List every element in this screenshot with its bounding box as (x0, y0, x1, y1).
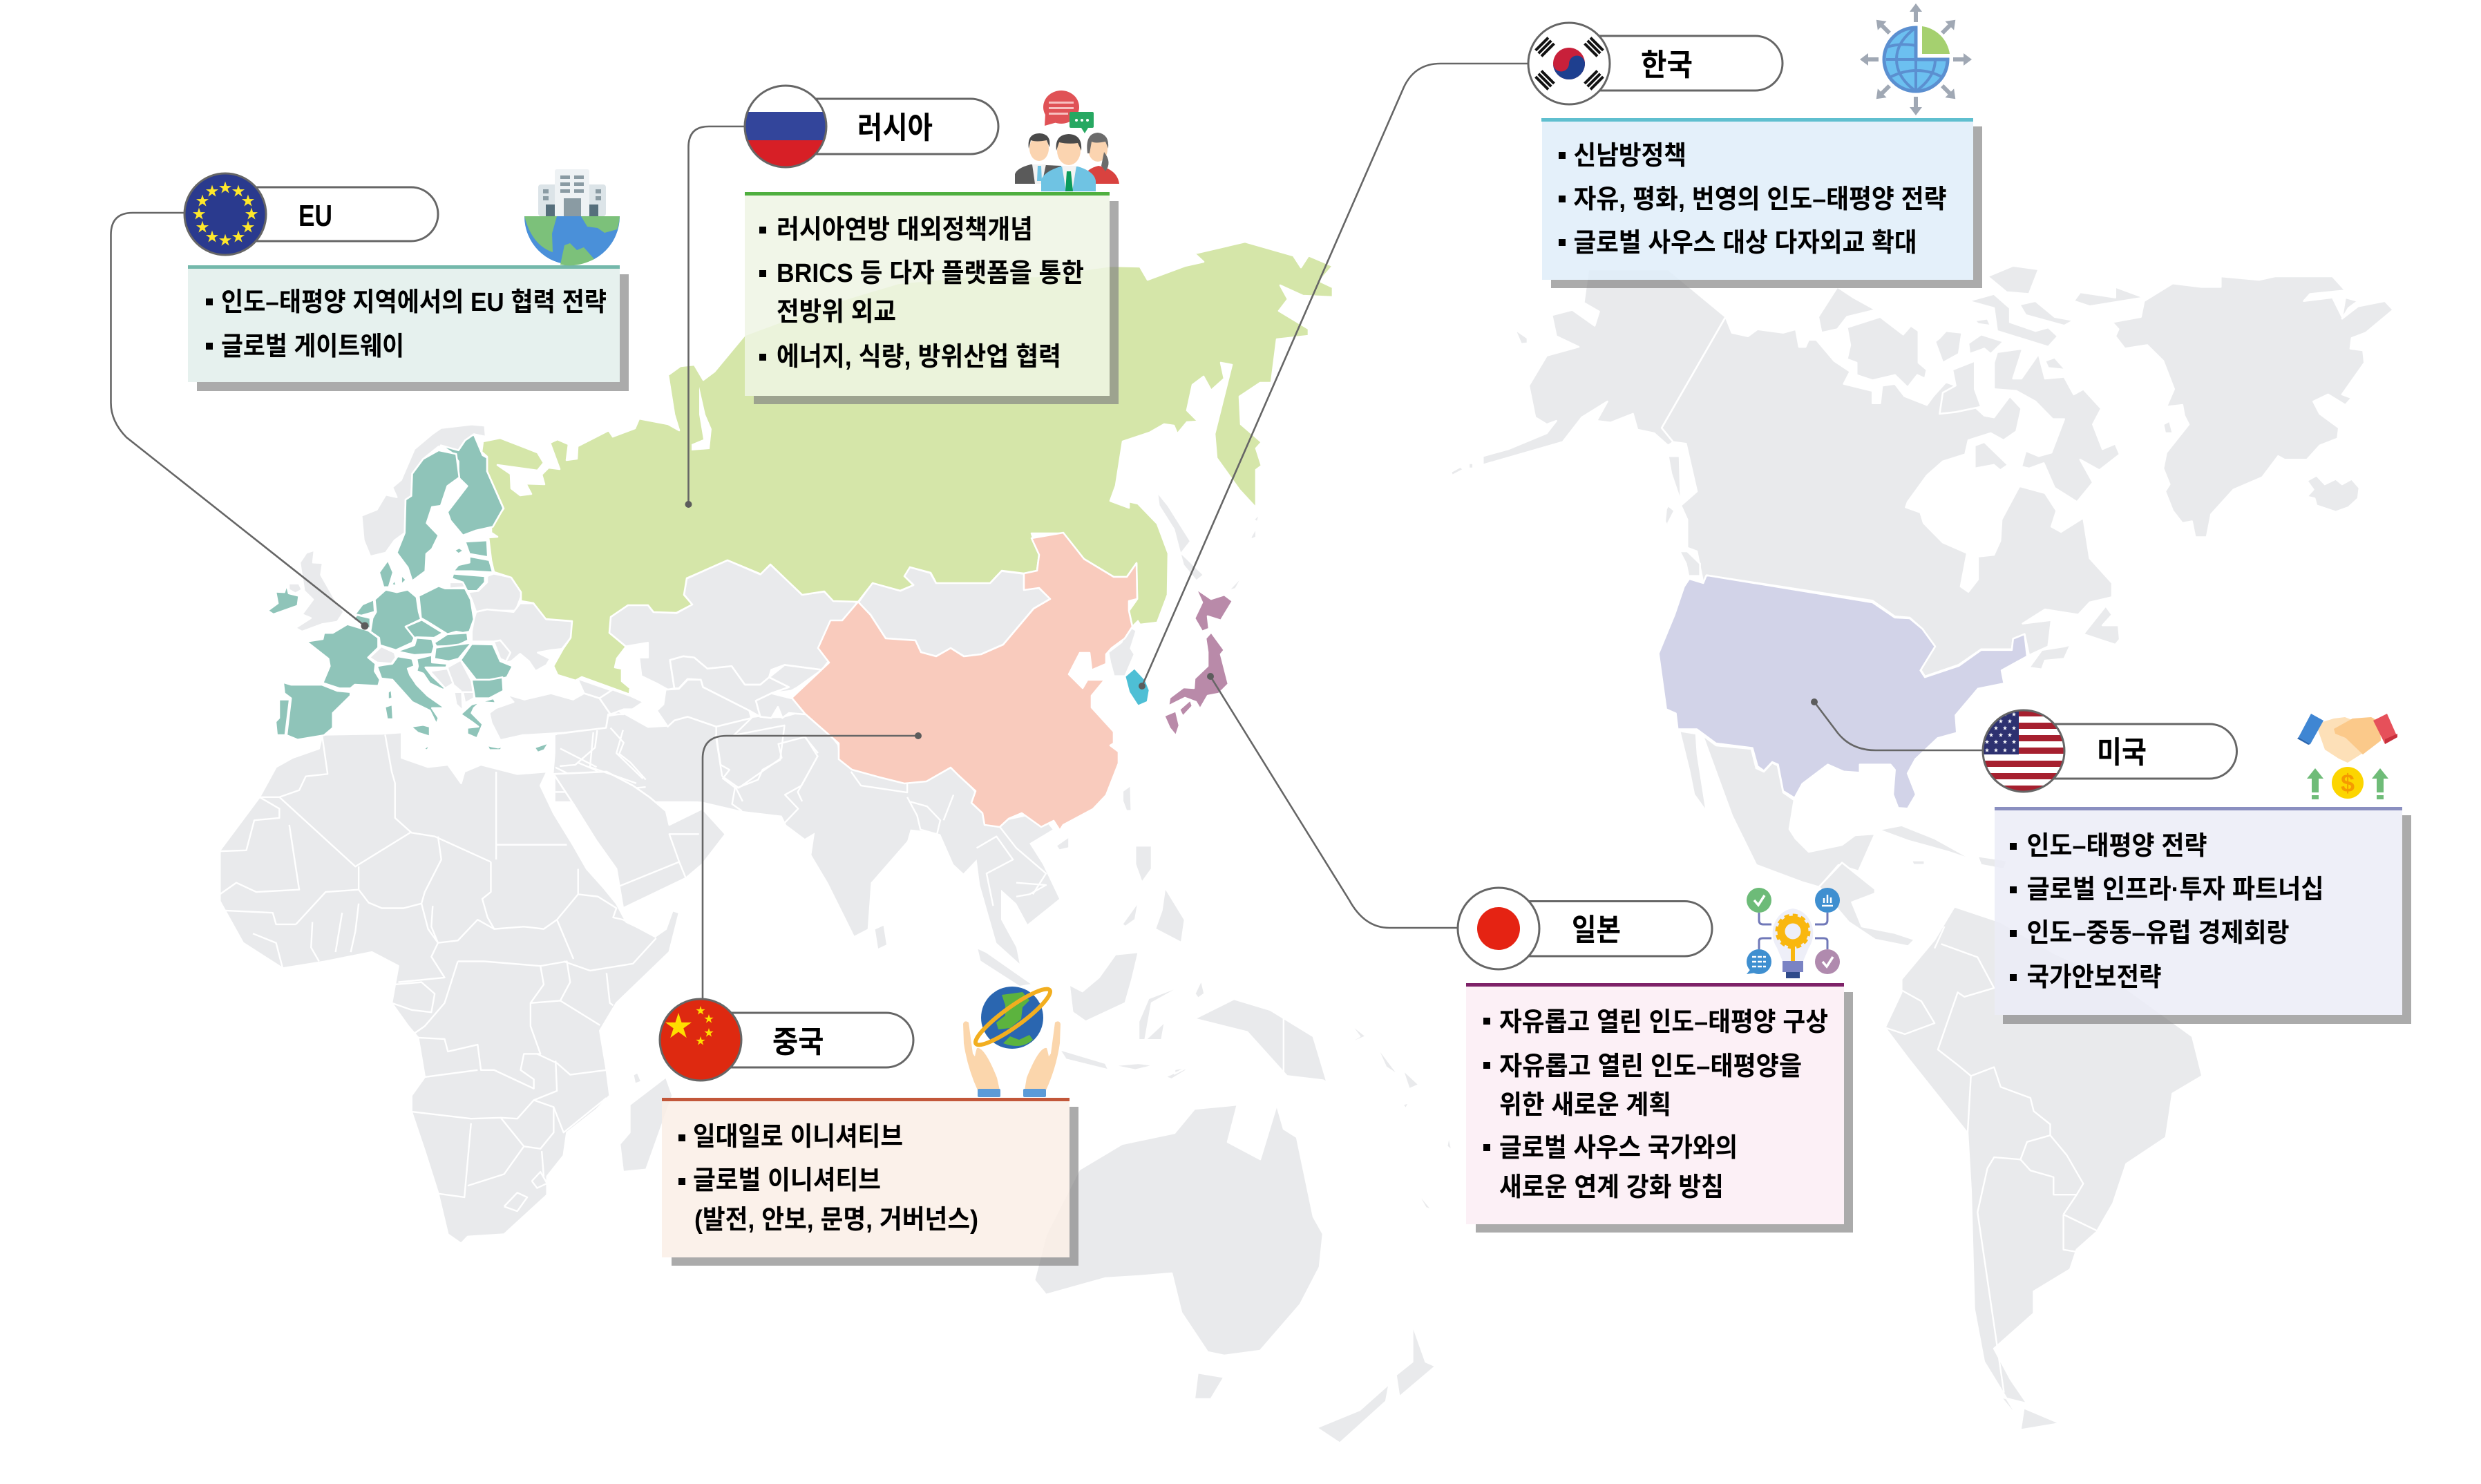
connector: USA flag to United States (1811, 698, 1984, 750)
USA name pill: 미국 (2097, 736, 2147, 770)
Japan name pill: 일본 (1572, 913, 1621, 947)
China bullet list: (발전, 안보, 문명, 거버넌스) (694, 1206, 978, 1235)
China bullet list (678, 1123, 978, 1235)
USA name pill (2024, 724, 2237, 779)
China name pill (701, 1013, 913, 1067)
USA card top rule (1995, 807, 2402, 810)
China bullet list: 일대일로 이니셔티브 (693, 1123, 903, 1152)
panel: EU (184, 169, 629, 391)
map: United States highlighted in lavender (1659, 575, 2027, 808)
China bullet list: 글로벌 이니셔티브 (693, 1166, 881, 1195)
panel: USA (1983, 710, 2411, 1024)
Russia bullet list: BRICS 등 다자 플랫폼을 통한 (777, 259, 1084, 288)
USA bullet list: 글로벌 인프라·투자 파트너십 (2027, 875, 2324, 904)
map: South America, Caribbean, Australia and Pacific islands in grey (1175, 826, 2203, 1443)
Japan card top rule (1466, 983, 1844, 987)
map: European Union members highlighted in teal (267, 435, 549, 752)
world map (218, 242, 2393, 1443)
Japan bullet list (1483, 1008, 1828, 1202)
USA bullet list: 국가안보전략 (2027, 963, 2161, 992)
icon: handshake with coin and arrows (2297, 714, 2397, 799)
Korea bullet list: 자유, 평화, 번영의 인도–태평양 전략 (1574, 185, 1947, 214)
Russia card top rule (745, 192, 1110, 196)
map: Mongolia, Sakhalin, North Korea and Taiwan in grey (858, 492, 1260, 811)
panel: China (660, 982, 1078, 1266)
EU name pill: EU (298, 199, 332, 233)
Russia bullet list (759, 216, 1084, 372)
Korea bullet list (1559, 142, 1947, 258)
map: Africa, Arabia, South and Southeast Asia in grey (218, 730, 1205, 1244)
connector: Russia flag to Russia (685, 126, 745, 508)
China card shadow (672, 1107, 1078, 1266)
connector: EU flag to Europe (111, 213, 369, 630)
Russia bullet list: 러시아연방 대외정책개념 (777, 216, 1033, 245)
Russia card body (745, 193, 1110, 396)
China card top rule (662, 1098, 1070, 1101)
Russia name pill: 러시아 (857, 111, 933, 145)
Korea name pill: 한국 (1641, 48, 1693, 82)
Korea name pill (1569, 36, 1783, 91)
USA bullet list (2010, 832, 2324, 992)
EU bullet list (206, 288, 607, 361)
Japan bullet list: 자유롭고 열린 인도–태평양 구상 (1499, 1008, 1828, 1037)
map: North America and Greenland in grey (1451, 266, 2393, 676)
USA bullet list: 인도–태평양 전략 (2027, 832, 2207, 861)
EU card body (188, 267, 620, 382)
flag: Russia (745, 86, 826, 167)
Russia bullet list: 전방위 외교 (777, 298, 896, 327)
map: Ob gulf cut out of Russia (692, 387, 712, 450)
flag: EU (184, 173, 266, 255)
map: South Korea highlighted in cyan (1125, 668, 1150, 706)
Japan bullet list: 글로벌 사우스 국가와의 (1499, 1134, 1738, 1163)
icon: globe with outward arrows (1860, 3, 1972, 115)
connector: Korea flag to South Korea (1139, 64, 1528, 689)
Japan card body (1466, 984, 1844, 1224)
Japan bullet list: 위한 새로운 계획 (1499, 1091, 1671, 1120)
map: Japan highlighted in mauve (1164, 589, 1233, 736)
Korea bullet list: 신남방정책 (1574, 142, 1686, 171)
panel: South Korea (1528, 3, 1982, 288)
flag: USA (1983, 710, 2064, 792)
USA bullet list: 인도–중동–유럽 경제회랑 (2027, 919, 2290, 948)
icon: handshake with coin and arrows: $ (2341, 769, 2355, 797)
icon: light bulb with gear and nodes (1747, 888, 1840, 978)
map: China highlighted in salmon (792, 533, 1137, 830)
EU card shadow (197, 274, 629, 391)
icon: hands holding a globe (963, 982, 1061, 1097)
EU bullet list: 글로벌 게이트웨이 (221, 332, 404, 361)
icon: buildings on a globe (524, 169, 620, 265)
map: Australia in grey (1034, 1105, 1323, 1355)
flag: Japan (1458, 888, 1539, 969)
Japan name pill (1499, 901, 1712, 956)
panel: Japan (1458, 888, 1853, 1233)
EU card top rule (188, 265, 620, 269)
Korea card top rule (1541, 118, 1973, 122)
icon: people talking with speech bubbles (1015, 91, 1119, 191)
EU bullet list: 인도–태평양 지역에서의 EU 협력 전략 (221, 288, 607, 317)
map: Northern Europe, Central Asia and Middle East land in grey (289, 424, 857, 801)
Russia bullet list: 에너지, 식량, 방위산업 협력 (777, 343, 1061, 372)
Japan bullet list: 자유롭고 열린 인도–태평양을 (1499, 1052, 1802, 1081)
panel: Russia (745, 86, 1119, 404)
China name pill: 중국 (772, 1025, 824, 1059)
EU name pill (225, 187, 438, 241)
USA card shadow (2003, 815, 2411, 1024)
USA card body (1995, 808, 2402, 1015)
Korea bullet list: 글로벌 사우스 대상 다자외교 확대 (1574, 229, 1917, 258)
Japan bullet list: 새로운 연계 강화 방침 (1499, 1173, 1724, 1202)
Korea card body (1542, 120, 1973, 280)
Japan card shadow (1476, 992, 1853, 1233)
map: Russia highlighted in green (482, 242, 1333, 694)
Russia card shadow (754, 201, 1119, 404)
flag: China (660, 999, 741, 1081)
map: South Asia, Iran and Levant base land in grey (553, 713, 1059, 964)
map: Mexico and Central America in grey (1680, 731, 1875, 887)
China card body (662, 1099, 1070, 1257)
Russia name pill (786, 99, 998, 154)
flag: South Korea (1528, 23, 1610, 104)
connector: China flag to China (703, 732, 922, 999)
connector: Japan flag to Japan (1207, 673, 1458, 928)
Korea card shadow (1551, 126, 1982, 288)
